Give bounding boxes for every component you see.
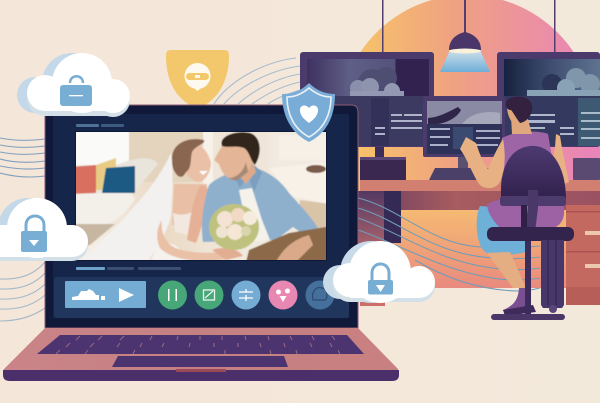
bride hair <box>172 139 204 177</box>
front notch <box>176 369 226 372</box>
keyboard and stand: centre <box>429 157 490 180</box>
groom shirt <box>202 167 319 242</box>
laptop base <box>4 328 398 371</box>
groom pants <box>246 226 326 260</box>
bride shoulder and arm <box>187 186 209 243</box>
wedding photo <box>76 132 326 260</box>
laptop <box>3 105 399 381</box>
torso <box>496 132 556 180</box>
groom collar <box>236 164 262 191</box>
control bar <box>54 277 349 318</box>
wave lines: right <box>358 198 540 291</box>
drawer legs <box>541 240 564 308</box>
monitor: right <box>497 52 600 147</box>
cloud shadow <box>323 241 402 303</box>
wave lines: top <box>214 58 300 104</box>
wave lines: left lower <box>0 262 45 321</box>
groom forearm <box>276 235 313 262</box>
veil <box>90 154 173 260</box>
monitor: left <box>300 52 434 147</box>
cloud body <box>333 241 435 303</box>
shield: blue heart <box>282 83 335 142</box>
icon: lock bag <box>60 76 92 106</box>
photo frame edge <box>75 131 327 261</box>
button: pink <box>268 280 298 310</box>
button: list <box>232 280 260 310</box>
play panel <box>65 281 146 308</box>
progress tabs <box>76 267 181 270</box>
desk <box>358 180 600 305</box>
cloud: lower right <box>323 241 435 303</box>
wave lines: left upper <box>0 138 45 177</box>
trackpad <box>112 356 288 367</box>
button: blue <box>306 280 334 310</box>
cloud: lower left <box>0 198 88 261</box>
cloud shadow <box>0 198 58 258</box>
cloud strip <box>27 80 130 117</box>
pendant lamps <box>382 0 556 72</box>
person at desk <box>460 97 574 320</box>
icon: padlock <box>21 216 47 252</box>
desk stand and device: left <box>360 147 406 180</box>
chair seat <box>487 227 574 241</box>
chair stem <box>525 241 531 314</box>
icon: padlock <box>368 264 393 294</box>
header ticks <box>76 124 124 127</box>
bride chest <box>172 184 207 225</box>
skin sliver by head <box>507 108 518 127</box>
button: edit <box>194 280 224 310</box>
groom t-shirt <box>239 188 270 242</box>
monitor: centre <box>423 96 505 157</box>
backdrop: sunset arch <box>339 0 600 288</box>
laptop base edge <box>3 370 399 381</box>
cloud strip <box>333 268 435 302</box>
chair back <box>501 146 566 204</box>
groom neck <box>240 162 256 184</box>
laptop screen bezel <box>45 105 358 328</box>
sofa <box>76 158 158 194</box>
cloud shadow <box>17 53 105 113</box>
cloud body <box>27 53 130 113</box>
groom head <box>214 146 252 179</box>
cloud: top left <box>17 53 130 117</box>
keyboard <box>37 335 364 354</box>
bride face <box>186 146 212 182</box>
head <box>506 97 532 123</box>
pillows <box>76 164 97 194</box>
red desk base peeking below cloud <box>360 300 385 306</box>
arms <box>460 137 505 188</box>
bouquet <box>209 204 259 250</box>
legs and skirt <box>477 197 564 316</box>
shield: yellow <box>166 50 229 105</box>
chair base <box>491 314 565 320</box>
cloud body <box>0 198 88 258</box>
cloud strip <box>0 229 88 261</box>
chair column <box>523 190 538 240</box>
button: pause <box>158 280 187 310</box>
blue circle behind monitor <box>321 101 369 149</box>
neck <box>511 116 532 134</box>
wall shelf <box>279 135 329 160</box>
bride dress <box>172 212 192 234</box>
side device on desk <box>573 158 600 180</box>
